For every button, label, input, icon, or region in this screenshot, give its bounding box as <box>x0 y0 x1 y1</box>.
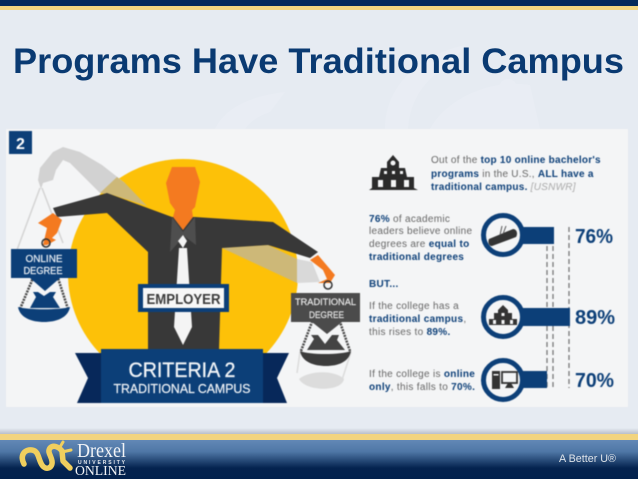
logo: wordmark <box>75 440 126 479</box>
value: 89 percent: 89% <box>575 307 615 329</box>
text: 76 percent: leaders believe online <box>369 226 472 237</box>
tagline: A Better U® <box>559 453 616 465</box>
text: traditional campus 89 percent: 89%. <box>427 327 451 338</box>
dashed guide lines <box>547 227 569 388</box>
criteria banner: CRITERIA 2 <box>128 359 236 382</box>
number badge: 2 <box>16 136 25 153</box>
right scale: traditional degree: TRADITIONAL <box>295 297 356 308</box>
left hand <box>38 213 62 245</box>
head <box>166 167 200 230</box>
value: 76 percent: 76% <box>575 226 613 248</box>
text: traditional campus 89 percent: , <box>463 314 466 325</box>
logo: Drexel dragon <box>22 442 71 468</box>
bar and icon: campus 89 percent <box>484 298 570 336</box>
logo: wordmark: ONLINE <box>75 464 126 479</box>
text: 76 percent: equal to <box>429 239 470 250</box>
text: online only 70 percent: If the college is <box>369 369 444 380</box>
logo: wordmark: UNIVERSITY <box>78 460 126 466</box>
text: online only 70 percent: only <box>369 382 391 393</box>
employer figure <box>38 167 335 350</box>
suit <box>53 193 318 350</box>
bar and icon: computer 70 percent <box>484 360 547 400</box>
ghost arms showing former scale position <box>17 147 351 389</box>
text: but: BUT... <box>369 279 399 290</box>
right hand <box>310 255 335 283</box>
text: top 10 programs: top 10 online bachelor's <box>481 155 601 166</box>
right scale: traditional degree: DEGREE <box>309 310 344 321</box>
text: top 10 programs: programs <box>431 169 479 180</box>
footer <box>0 428 638 479</box>
panel: infographic <box>6 129 628 407</box>
background dragon watermark <box>215 45 540 129</box>
criteria banner <box>75 349 289 403</box>
logo: wordmark: Drexel <box>77 440 126 462</box>
text: traditional campus 89 percent: traditional campus <box>369 314 463 325</box>
number badge <box>9 131 32 154</box>
text: traditional campus 89 percent: If the college has a <box>369 301 459 312</box>
left scale: online degree: ONLINE <box>26 254 63 265</box>
yellow circle <box>68 159 298 389</box>
icon: campus building <box>369 155 418 190</box>
text: online only 70 percent: online <box>444 369 475 380</box>
title: Programs Have Traditional Campus <box>13 42 624 81</box>
value: 70 percent: 70% <box>575 370 614 392</box>
text: top 10 programs: in the U.S., ALL have a <box>482 169 594 180</box>
text: top 10 programs: traditional campus. <box>431 182 528 193</box>
left scale: online degree: DEGREE <box>24 266 63 277</box>
text: 76 percent: degrees are <box>369 239 429 250</box>
left scale: online degree <box>11 239 77 322</box>
employer label <box>138 284 229 312</box>
comparison chart <box>484 216 615 400</box>
text: 76 percent: traditional degrees <box>369 252 464 263</box>
top bar <box>0 0 638 10</box>
text: traditional campus 89 percent: this rises to <box>369 327 427 338</box>
text: 76 percent: of academic <box>390 214 450 225</box>
text: top 10 programs: [USNWR] <box>528 182 576 193</box>
right scale: traditional degree <box>291 281 360 366</box>
employer label: EMPLOYER <box>146 292 221 308</box>
collar <box>170 217 196 252</box>
tie <box>174 235 192 345</box>
criteria banner: TRADITIONAL CAMPUS <box>114 382 250 396</box>
text: online only 70 percent: , this falls to 70%. <box>391 382 475 393</box>
text: top 10 programs: Out of the <box>431 155 481 166</box>
bar and icon: diploma 76 percent <box>484 216 554 254</box>
text: 76 percent: 76% <box>369 214 390 225</box>
